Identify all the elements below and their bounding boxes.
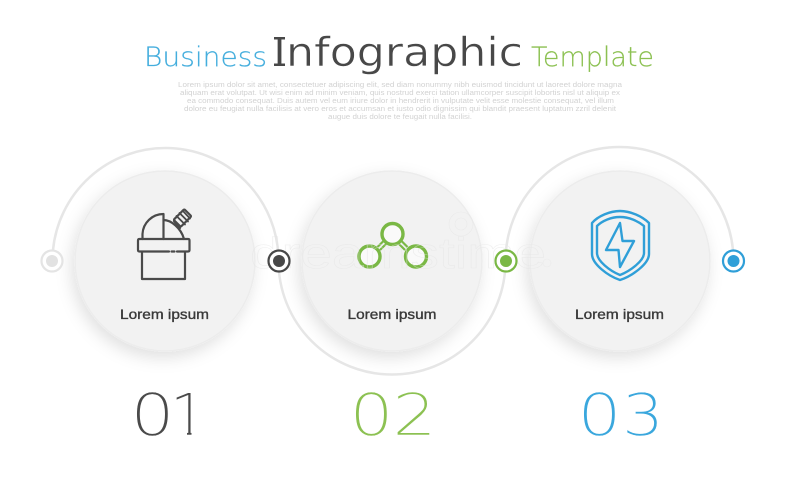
- step 3 disc: [530, 171, 710, 351]
- number 01: 1: [170, 381, 207, 449]
- title: [144, 30, 654, 76]
- watermark: dreamstime: [250, 229, 546, 278]
- connecting wave line: [53, 147, 733, 374]
- step 1 label: Lorem ipsum: [120, 307, 209, 322]
- number 02: 2: [392, 381, 436, 449]
- number 02: 0: [350, 381, 394, 449]
- node: step 1: [268, 250, 290, 272]
- number 01: [130, 381, 207, 449]
- panel: step 1: [75, 171, 255, 351]
- panel: step 3: [530, 171, 710, 351]
- step 1 disc: [75, 171, 255, 351]
- step 3 label: Lorem ipsum: [575, 307, 664, 322]
- title word: Business: Business: [144, 42, 267, 73]
- title word: Template: Template: [531, 42, 654, 73]
- icon: molecule: [359, 224, 426, 267]
- panel: step 2: [302, 171, 482, 351]
- intro paragraph: dolore eu feugiat nulla facilisis at vero eros et accumsan et iusto odio dignissim qui blandit praesent luptatum zzril delenit: [184, 106, 616, 113]
- intro paragraph: aliquam erat volutpat. Ut wisi enim ad minim veniam, quis nostrud exerci tation ullamcorper suscipit lobortis nisl ut aliquip ex: [180, 90, 621, 97]
- title word: Infographic: Infographic: [273, 30, 523, 76]
- intro paragraph: Lorem ipsum dolor sit amet, consectetuer adipiscing elit, sed diam nonummy nibh euismod tincidunt ut laoreet dolore magna: [178, 82, 622, 89]
- node: step 3: [723, 250, 744, 272]
- node: start: [42, 250, 62, 272]
- icon: shield with lightning bolt: [592, 211, 649, 280]
- step 2 disc: [302, 171, 482, 351]
- intro paragraph: [178, 82, 622, 121]
- number 03: [578, 381, 664, 449]
- number 03: 0: [578, 381, 622, 449]
- intro paragraph: augue duis dolore te feugait nulla facilisi.: [328, 114, 472, 121]
- number 01: 0: [130, 381, 174, 449]
- icon: observatory: [138, 209, 191, 279]
- intro paragraph: ea commodo consequat. Duis autem vel eum iriure dolor in hendrerit in vulputate velit esse molestie consequat, vel illum: [187, 98, 614, 105]
- number 02: [350, 381, 436, 449]
- watermark: [250, 212, 551, 278]
- step 2 label: Lorem ipsum: [348, 307, 436, 322]
- number 03: 3: [622, 381, 664, 449]
- node: step 2: [496, 250, 516, 272]
